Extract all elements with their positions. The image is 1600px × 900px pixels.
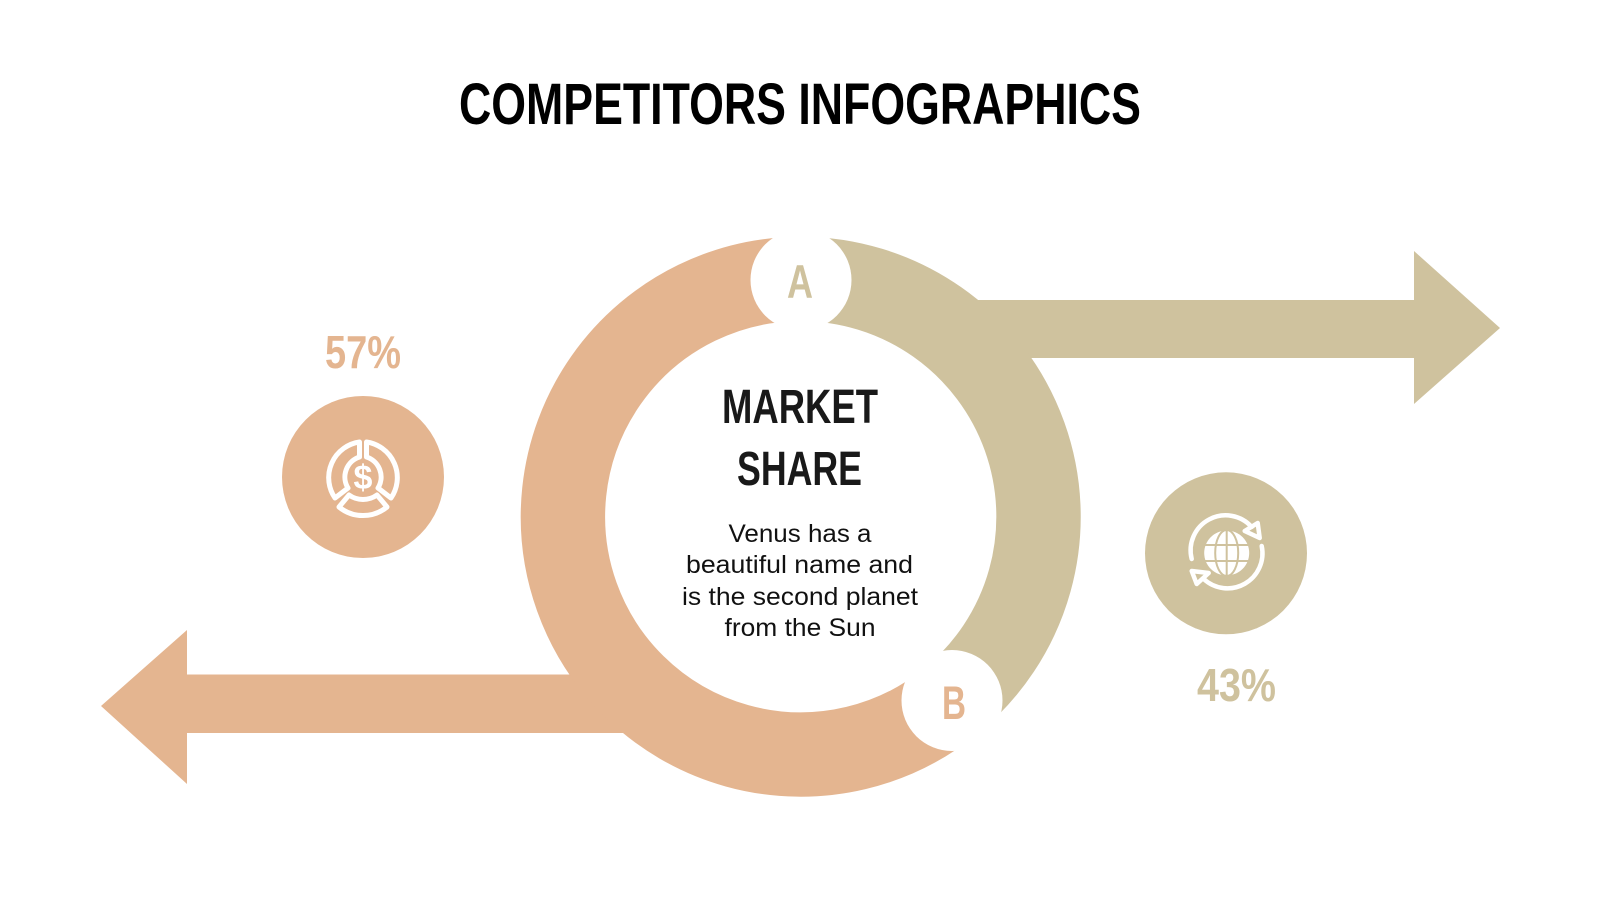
center description: [682, 520, 918, 642]
stat: 43%: 43%: [1197, 659, 1276, 711]
badge B: [902, 650, 1002, 751]
center heading: [722, 381, 878, 496]
badge A: [750, 230, 852, 330]
ring segment: beige 43%: [800, 279, 1039, 701]
arrow: peach, pointing left: [101, 630, 623, 784]
icon circle: money chart: $: [354, 459, 373, 497]
title: COMPETITORS INFOGRAPHICS: [459, 72, 1141, 137]
badge A: A: [787, 255, 813, 308]
center description: beautiful name and: [686, 551, 913, 579]
ring segment: peach 57%: [563, 279, 951, 754]
center description: from the Sun: [724, 614, 876, 642]
arrow: beige, pointing right: [978, 251, 1500, 404]
center description: Venus has a: [728, 520, 872, 548]
center description: is the second planet: [682, 583, 918, 611]
center heading: MARKET: [722, 381, 878, 434]
stat: 57%: 57%: [325, 326, 401, 378]
ring chart: [563, 279, 1039, 754]
icon circle: globe with arrows: [1145, 472, 1307, 634]
icon circle: money chart: [282, 396, 444, 558]
center heading: SHARE: [737, 443, 862, 496]
badge B: B: [942, 676, 966, 729]
